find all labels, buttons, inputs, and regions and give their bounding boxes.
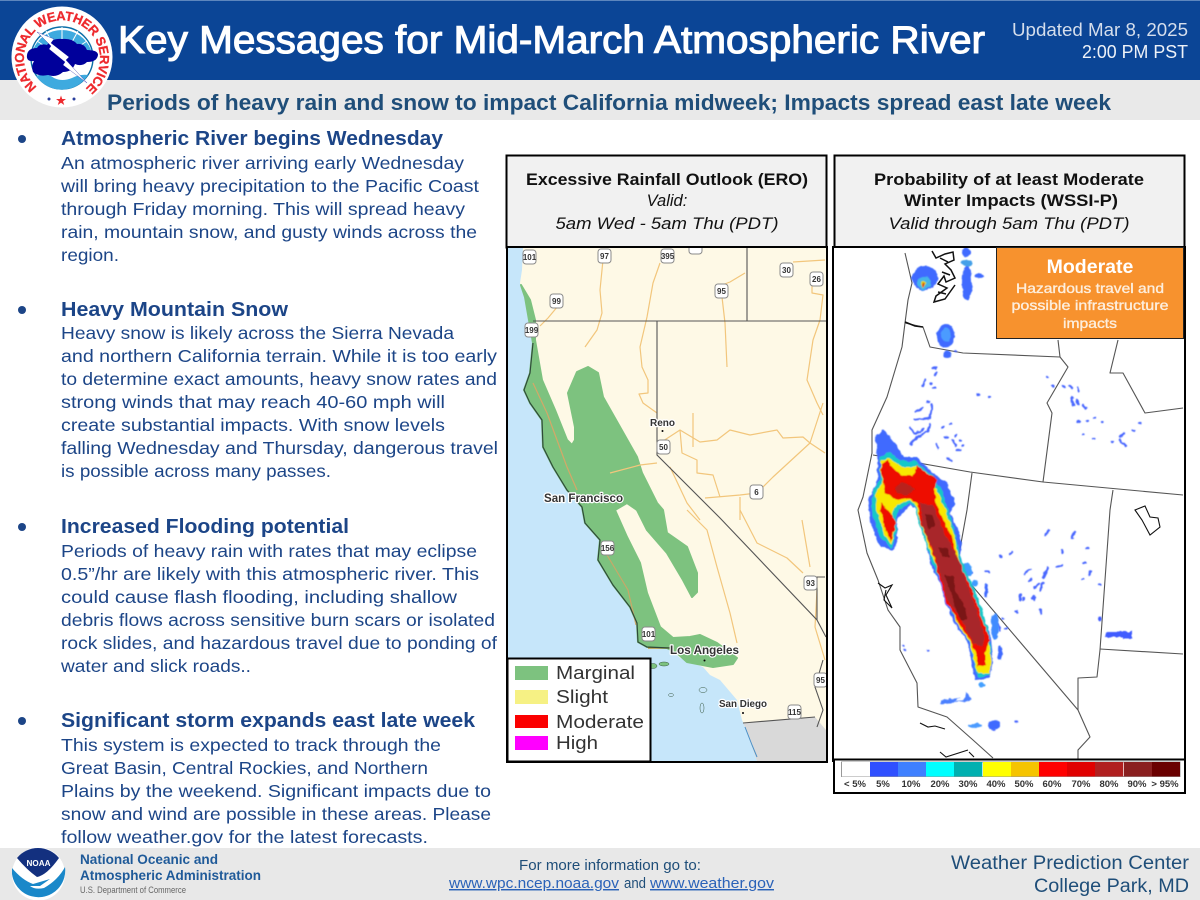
legend: excessive rainfall categories: Marginal [556,663,635,683]
darkest probability layer [925,513,935,530]
highway shields: 93 [806,579,815,588]
message: increased flooding potential: debris flows across sensitive burn scars or isolated [61,610,495,630]
message: storm expands east: snow and wind are possible in these areas. Please [61,804,491,824]
red probability layer [881,460,990,667]
legend: probability colour bar: 70% [1071,779,1091,790]
legend: probability colour bar: 5% [876,779,890,790]
water outlines [878,251,1160,757]
cyan probability layer [871,452,992,677]
legend: probability colour bar: < 5% [844,779,867,790]
icon: NOAA logo: NOAA [26,859,51,868]
issuing office [951,853,1190,897]
highway shields: 97 [600,252,609,261]
message: storm expands east: follow weather.gov for the latest forecasts. [61,827,428,847]
panel: excessive rainfall outlook heading: Excessive Rainfall Outlook (ERO) [526,171,808,189]
panel: excessive rainfall outlook heading [506,156,826,248]
message: heavy mountain snow: falling Wednesday and Thursday, dangerous travel [61,438,498,458]
panel: winter impacts heading: Probability of at least Moderate [874,171,1144,189]
legend: probability colour bar: 20% [930,779,950,790]
update timestamp: Updated Mar 8, 2025 [1012,20,1188,40]
city labels [544,417,767,710]
more information links: www.wpc.ncep.noaa.gov [448,876,620,892]
agency name: Atmospheric Administration [80,867,261,883]
message: storm expands east: This system is expected to track through the [61,735,441,755]
callout: moderate impact definition: possible infrastructure [1012,297,1169,313]
update timestamp: 2:00 PM PST [1082,42,1188,62]
message: heavy mountain snow: is possible across many passes. [61,461,331,481]
message: storm expands east [18,710,491,847]
highway shields: 99 [552,297,561,306]
more information links: and [624,876,646,892]
legend: excessive rainfall categories: Slight [556,687,608,707]
message: increased flooding potential: could cause flash flooding, including shallow [61,587,457,607]
legend: excessive rainfall categories [508,658,650,762]
title: Key Messages for Mid-March Atmospheric River [118,19,985,62]
panel: key messages text [18,128,498,847]
panel: winter impacts heading [834,156,1184,248]
callout: moderate impact definition [996,248,1184,338]
brown probability layer [895,482,915,495]
icon: NOAA logo [12,848,65,900]
message: atmospheric river begins: Atmospheric River begins Wednesday [61,128,444,150]
coastline [524,343,670,648]
message: increased flooding potential: water and slick roads.. [60,656,251,676]
more information links: For more information go to: [519,858,701,874]
panel: excessive rainfall outlook heading: Valid: [647,192,687,210]
subtitle band: Periods of heavy rain and snow to impact California midweek; Impacts spread east late week [107,90,1112,115]
message: storm expands east: Significant storm expands east late week [61,710,476,732]
legend: probability colour bar: 10% [901,779,921,790]
message: increased flooding potential: Periods of heavy rain with rates that may eclipse [61,541,477,561]
map: excessive rainfall outlook [507,243,827,762]
message: increased flooding potential: rock slides, and hazardous travel due to ponding of [61,633,497,653]
header banner [0,0,1200,80]
legend: probability colour bar: 50% [1014,779,1034,790]
message: atmospheric river begins: rain, mountain snow, and gusty winds across the [61,222,477,242]
message: heavy mountain snow: and northern California terrain. While it is too early [61,346,497,366]
message: increased flooding potential [18,516,497,676]
highway shields: 395 [661,252,675,261]
legend: probability colour bar: > 95% [1151,779,1179,790]
message: heavy mountain snow: create substantial impacts. With snow levels [61,415,445,435]
legend: probability colour bar: 80% [1099,779,1119,790]
more information links [448,858,775,892]
legend: probability colour bar: 60% [1042,779,1062,790]
message: storm expands east: Plains by the weekend. Significant impacts due to [61,781,491,801]
footer band [0,848,1200,900]
update timestamp [1012,20,1188,62]
agency name: U.S. Department of Commerce [80,885,186,895]
issuing office: Weather Prediction Center [951,853,1190,874]
city labels: Los Angeles [670,643,739,657]
message: atmospheric river begins [18,128,479,265]
map: winter storm severity probability [833,247,1185,761]
callout: moderate impact definition: impacts [1063,315,1117,331]
legend: probability colour bar [834,760,1185,793]
more information links: www.weather.gov [649,876,775,892]
washington and southern blobs [912,247,1132,730]
callout: moderate impact definition: Hazardous travel and [1016,280,1164,296]
highway shields: 95 [816,676,825,685]
issuing office: College Park, MD [1034,876,1189,897]
highway shields: 50 [659,443,668,452]
message: atmospheric river begins: region. [61,245,119,265]
highway shields: 30 [782,266,791,275]
logo stars [48,96,76,105]
city labels: San Francisco [544,491,623,505]
scattered low probabilities [903,351,1140,730]
message: heavy mountain snow: strong winds that may reach 40-60 mph will [61,392,445,412]
islands [649,662,707,713]
legend: probability colour bar: 40% [986,779,1006,790]
message: atmospheric river begins: through Friday morning. This will spread heavy [61,199,465,219]
city labels: San Diego [719,698,767,710]
message: atmospheric river begins: An atmospheric river arriving early Wednesday [61,153,464,173]
message: increased flooding potential: 0.5”/hr are likely with this atmospheric river. This [61,564,479,584]
blue probability layer [868,430,993,680]
highway shields: 115 [788,708,802,717]
highway shields: 6 [754,488,759,497]
message: heavy mountain snow: Heavy Mountain Snow [61,299,288,321]
ocean [508,248,757,761]
state outlines [858,253,1183,760]
panel: winter impacts heading: Winter Impacts (WSSI-P) [904,192,1118,210]
message: storm expands east: Great Basin, Central Rockies, and Northern [61,758,428,778]
legend: excessive rainfall categories: Moderate [556,712,644,732]
city labels: Reno [650,417,675,429]
panel: excessive rainfall outlook heading: 5am Wed - 5am Thu (PDT) [556,215,778,233]
highway shields: 199 [525,326,539,335]
message: heavy mountain snow: Heavy snow is likely across the Sierra Nevada [61,323,454,343]
highway shields [523,243,827,719]
message: increased flooding potential: Increased Flooding potential [61,516,349,538]
highway shields: 26 [812,275,821,284]
callout: moderate impact definition: Moderate [1047,256,1133,278]
message: heavy mountain snow [18,299,498,481]
yellow probability layer [875,458,992,673]
panel: winter impacts heading: Valid through 5am Thu (PDT) [888,215,1130,233]
highway shields: 101 [523,253,537,262]
state borders [533,248,826,727]
highway shields: 101 [642,630,656,639]
highway shields: 156 [601,544,615,553]
message: atmospheric river begins: will bring heavy precipitation to the Pacific Coast [60,176,479,196]
message: heavy mountain snow: to determine exact amounts, heavy snow rates and [61,369,497,389]
agency name: National Oceanic and [80,851,218,867]
legend: probability colour bar: 90% [1127,779,1147,790]
high probability horseshoe and band [868,430,993,680]
mexico [743,717,826,761]
logo ring text: NATIONAL WEATHER SERVICE [14,11,110,95]
icon: National Weather Service logo [12,6,112,108]
highways [533,260,825,660]
subtitle band [0,80,1200,120]
highway shields: 95 [717,287,726,296]
agency name [80,851,261,895]
legend: excessive rainfall categories: High [556,733,598,753]
legend: probability colour bar: 30% [958,779,978,790]
marginal risk area [521,285,737,667]
